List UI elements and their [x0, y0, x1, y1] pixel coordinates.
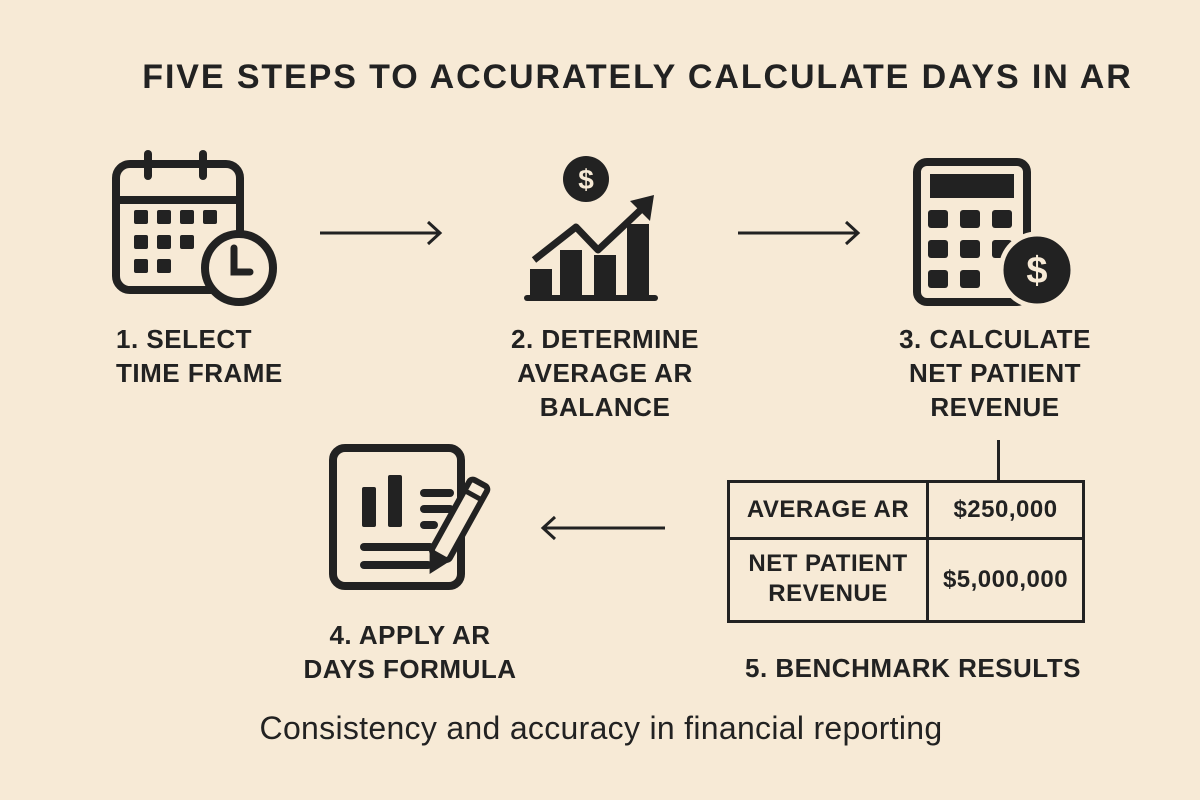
label 2: 2. DETERMINE	[511, 324, 699, 354]
label 4: DAYS FORMULA	[303, 654, 517, 684]
icon: calculator: $	[1026, 250, 1048, 292]
icon: chart: $	[578, 164, 594, 195]
table: NET PATIENT	[748, 550, 908, 577]
table: REVENUE	[768, 580, 888, 607]
label 1: TIME FRAME	[116, 358, 283, 388]
title: FIVE STEPS TO ACCURATELY CALCULATE DAYS IN AR	[142, 58, 1133, 96]
label 2: BALANCE	[540, 392, 670, 422]
arrow left	[540, 516, 665, 540]
icon: calculator	[913, 158, 1070, 306]
label 2	[511, 324, 699, 422]
icon: chart	[524, 156, 658, 301]
label 1	[116, 324, 283, 388]
label 2: AVERAGE AR	[517, 358, 693, 388]
arrow 1	[320, 220, 442, 246]
label 3: 3. CALCULATE	[899, 324, 1091, 354]
arrow 2	[738, 220, 860, 246]
label 1: 1. SELECT	[116, 324, 252, 354]
connector line	[997, 440, 1000, 481]
icon: calendar	[112, 150, 277, 306]
label 3: REVENUE	[930, 392, 1060, 422]
label 5: 5. BENCHMARK RESULTS	[745, 653, 1081, 683]
table: $5,000,000	[943, 566, 1068, 593]
table: AVERAGE AR	[747, 496, 909, 523]
label 4	[303, 620, 517, 684]
label 4: 4. APPLY AR	[329, 620, 491, 650]
label 3: NET PATIENT	[909, 358, 1081, 388]
table: $250,000	[953, 496, 1058, 523]
footer text: Consistency and accuracy in financial reporting	[260, 710, 942, 746]
label 3	[899, 324, 1091, 422]
icon: document with pencil	[329, 444, 490, 590]
table	[727, 480, 1085, 623]
